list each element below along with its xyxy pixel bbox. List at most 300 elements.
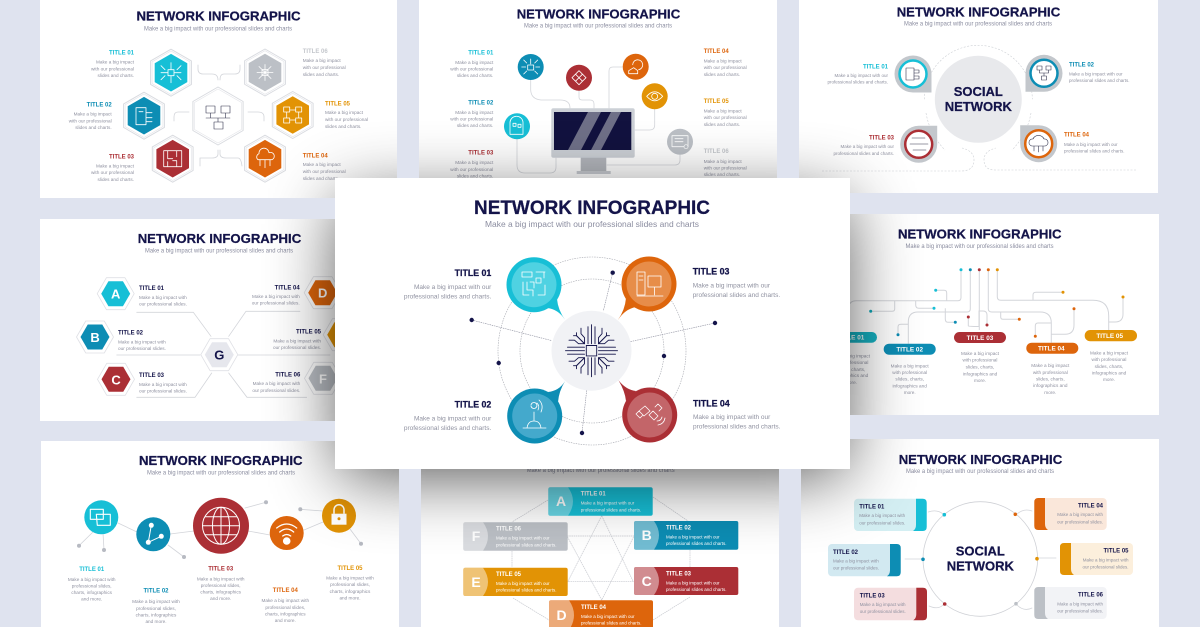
pill: title 04: with professional bbox=[1033, 370, 1068, 375]
panel: circuit timeline slide bbox=[800, 214, 1159, 415]
heading: NETWORK INFOGRAPHIC bbox=[899, 452, 1063, 467]
label: title 03 bbox=[833, 135, 895, 156]
central circle: NETWORK bbox=[947, 559, 1014, 574]
label: title 03: professional slides and charts. bbox=[693, 292, 780, 299]
label: title 03 bbox=[91, 155, 135, 182]
hexagon: E bbox=[323, 319, 360, 351]
subtitle: Make a big impact with our professional slides and charts bbox=[147, 470, 295, 477]
label: title 02 bbox=[118, 330, 166, 351]
pill: title 04: infographics and bbox=[1033, 383, 1068, 388]
subtitle: Make a big impact with our professional slides and charts bbox=[524, 22, 672, 30]
central circle bbox=[923, 502, 1038, 616]
label: title 03 bbox=[693, 267, 780, 299]
label: title 01: TITLE 01 bbox=[455, 268, 491, 278]
label: title 03: TITLE 03 bbox=[693, 267, 729, 277]
label: title 06: Make a big impact bbox=[303, 58, 341, 63]
label: title 03: Make a big impact bbox=[96, 164, 135, 168]
box: title 05 bbox=[1060, 543, 1133, 575]
label: title 02: professional slides and charts. bbox=[404, 425, 491, 432]
heading: NETWORK INFOGRAPHIC bbox=[138, 231, 302, 246]
label: title 01: Make a big impact with our bbox=[834, 73, 888, 78]
connectors bbox=[517, 67, 680, 173]
label: title 01 bbox=[68, 567, 116, 602]
label: title 02: charts, infographics bbox=[136, 612, 177, 618]
box: title 02 bbox=[828, 544, 901, 576]
label: title 04: charts, infographics bbox=[265, 612, 306, 616]
box: title 05: our professional slides. bbox=[1082, 564, 1128, 570]
hexagon: B bbox=[76, 321, 114, 353]
pill: title 05 bbox=[1085, 330, 1137, 382]
central circle bbox=[935, 56, 1022, 143]
central circle: SOCIAL bbox=[956, 543, 1005, 558]
label: title 02: professional slides, bbox=[136, 606, 176, 611]
box: title 04: TITLE 04 bbox=[1078, 504, 1104, 510]
label: title 03: professional slides and charts. bbox=[833, 151, 894, 156]
label: title 01: Make a big impact with bbox=[68, 577, 116, 582]
box: B: Make a big impact with our bbox=[666, 534, 720, 539]
label: title 01 bbox=[827, 65, 889, 85]
box: title 04 bbox=[1034, 498, 1107, 530]
label: title 05: professional slides, bbox=[330, 582, 370, 587]
hexagon: G: G bbox=[214, 348, 224, 363]
subtitle: Make a big impact with our professional slides and charts bbox=[906, 243, 1054, 250]
circle dots bbox=[921, 512, 1039, 606]
pill: title 05: TITLE 05 bbox=[1096, 333, 1123, 340]
label: title 04 bbox=[693, 399, 781, 431]
label: title 02: with our professional bbox=[450, 116, 493, 122]
label: title 04: Make a big impact with bbox=[252, 294, 300, 299]
spokes with dots bbox=[472, 273, 715, 433]
label: title 06: with our professional bbox=[303, 65, 346, 70]
connectors bbox=[117, 311, 330, 397]
icon circle: title 05 bbox=[642, 83, 668, 109]
label: title 06: our professional slides. bbox=[252, 388, 300, 393]
label: title 04: professional slides, bbox=[265, 605, 305, 610]
monitor bbox=[551, 108, 635, 174]
box: F: professional slides and charts. bbox=[496, 542, 557, 547]
label: title 03: with our professional bbox=[450, 167, 493, 172]
label: title 03: slides and charts. bbox=[98, 177, 134, 182]
network dots bbox=[470, 270, 717, 435]
label: title 02: Make a big impact with bbox=[118, 339, 166, 344]
icon circle: title 04 bbox=[623, 54, 649, 80]
hexagon: G bbox=[201, 339, 238, 371]
label: title 03 bbox=[450, 151, 494, 178]
subtitle: Make a big impact with our professional slides and charts bbox=[527, 467, 675, 474]
icon circle: title 01 bbox=[518, 54, 544, 80]
label: title 05 bbox=[273, 330, 322, 350]
hexagon: C: C bbox=[111, 372, 121, 387]
box: E: Make a big impact with our bbox=[496, 581, 550, 586]
label: title 02: slides and charts. bbox=[457, 123, 493, 128]
label: title 03: TITLE 03 bbox=[109, 155, 135, 161]
box: F: TITLE 06 bbox=[496, 527, 522, 533]
box: title 05: Make a big impact with bbox=[1083, 558, 1129, 562]
hexagon: F bbox=[304, 362, 342, 394]
box: D: TITLE 04 bbox=[581, 605, 607, 611]
label: title 06: Make a big impact bbox=[704, 159, 742, 164]
label: title 06: Make a big impact with bbox=[253, 381, 301, 386]
label: title 01: with our professional bbox=[91, 66, 134, 72]
label: title 03: with our professional bbox=[91, 170, 134, 175]
label: title 05: TITLE 05 bbox=[337, 566, 363, 572]
label: title 06 bbox=[252, 372, 301, 393]
label: title 05: Make a big impact with bbox=[326, 576, 374, 581]
label: title 02: TITLE 02 bbox=[118, 330, 144, 336]
box: C: TITLE 03 bbox=[666, 571, 692, 577]
pill: title 01: TITLE 01 bbox=[838, 335, 865, 342]
pill: title 03: Make a big impact bbox=[961, 351, 1000, 356]
panel: computer network slide bbox=[419, 0, 777, 178]
box: title 03 bbox=[854, 588, 927, 620]
pin: title 04 bbox=[1020, 125, 1057, 162]
label: title 06: slides and charts. bbox=[704, 172, 740, 177]
label: title 03: Make a big impact with bbox=[139, 382, 187, 387]
box: A: TITLE 01 bbox=[581, 492, 606, 498]
label: title 04: our professional slides. bbox=[252, 300, 300, 306]
dotted rings bbox=[498, 257, 686, 445]
subtitle: Make a big impact with our professional slides and charts bbox=[904, 21, 1052, 28]
label: title 05: slides and charts. bbox=[704, 122, 740, 127]
label: title 04: slides and charts. bbox=[303, 176, 339, 181]
label: title 06 bbox=[704, 149, 747, 177]
box: title 04: Make a big impact with bbox=[1057, 512, 1103, 517]
hexagon: A bbox=[97, 278, 134, 310]
icon circle: title 02 bbox=[504, 113, 530, 139]
bubble: title 02 bbox=[507, 381, 565, 444]
label: title 03: slides and charts. bbox=[457, 174, 493, 178]
label: title 03: TITLE 03 bbox=[208, 567, 234, 573]
box: E: E bbox=[471, 574, 481, 590]
pill: title 03: infographics and bbox=[963, 372, 998, 376]
label: title 02: TITLE 02 bbox=[143, 589, 169, 595]
label: title 04: with our professional bbox=[303, 169, 346, 174]
box: E bbox=[463, 568, 568, 596]
box: A bbox=[548, 487, 653, 516]
label: title 04: Make a big impact bbox=[303, 162, 341, 167]
pill: title 01: infographics and bbox=[834, 373, 869, 378]
bubble: title 01 bbox=[506, 257, 565, 320]
label: title 04 bbox=[252, 285, 300, 306]
label: title 01: professional slides, bbox=[72, 584, 112, 588]
circuit lines bbox=[848, 270, 1123, 344]
label: title 04: professional slides and charts. bbox=[1064, 148, 1125, 154]
connectors bbox=[905, 510, 1056, 609]
box: D bbox=[549, 600, 653, 627]
label: title 05: charts, infographics bbox=[330, 589, 371, 594]
label: title 01: and more. bbox=[81, 596, 102, 602]
box: A: professional slides and charts. bbox=[581, 507, 641, 512]
box: B: TITLE 02 bbox=[666, 525, 692, 531]
subtitle: Make a big impact with our professional slides and charts bbox=[906, 468, 1054, 475]
label: title 02: professional slides and charts. bbox=[1069, 78, 1130, 83]
pill: title 01: Make a big impact bbox=[832, 354, 871, 358]
label: title 01: Make a big impact bbox=[455, 60, 494, 65]
pill: title 03: TITLE 03 bbox=[967, 335, 994, 342]
label: title 02 bbox=[132, 589, 180, 624]
central circle: SOCIAL bbox=[954, 84, 1003, 99]
label: title 06: with our professional bbox=[704, 166, 747, 170]
pill: title 04 bbox=[1026, 343, 1078, 395]
box: E: professional slides and charts. bbox=[496, 588, 557, 593]
bubble: title 03 bbox=[618, 256, 676, 320]
icon circle: wifi bbox=[270, 516, 304, 550]
pill: title 02: infographics and bbox=[892, 383, 927, 388]
label: title 06 bbox=[303, 49, 346, 77]
subtitle: Make a big impact with our professional slides and charts bbox=[485, 219, 699, 229]
label: title 02 bbox=[69, 103, 112, 130]
label: title 05 bbox=[325, 102, 368, 129]
label: title 01: TITLE 01 bbox=[863, 65, 889, 71]
label: title 02: TITLE 02 bbox=[87, 103, 112, 109]
box: title 06: TITLE 06 bbox=[1078, 592, 1104, 598]
label: title 01: Make a big impact with bbox=[139, 295, 187, 300]
icon circle: title 06 bbox=[667, 129, 693, 155]
box: title 02: our professional slides. bbox=[833, 566, 879, 571]
pill: title 04: Make a big impact bbox=[1031, 363, 1070, 368]
pill: title 04: more. bbox=[1044, 390, 1056, 395]
label: title 02 bbox=[1069, 63, 1130, 83]
label: title 05: our professional slides. bbox=[273, 345, 321, 350]
label: title 03 bbox=[139, 373, 187, 394]
label: title 02: Make a big impact with our bbox=[414, 416, 492, 423]
label: title 01: Make a big impact bbox=[96, 60, 135, 65]
pill: title 05: Make a big impact bbox=[1090, 350, 1129, 356]
label: title 01: slides and charts. bbox=[98, 73, 134, 78]
panel: social network pins slide bbox=[799, 0, 1158, 193]
heading: NETWORK INFOGRAPHIC bbox=[897, 5, 1061, 20]
label: title 02: with our professional bbox=[69, 118, 112, 124]
hexagon: C bbox=[98, 363, 134, 395]
pill: title 05: more. bbox=[1103, 377, 1115, 382]
pill: title 03: more. bbox=[974, 378, 986, 383]
panel: star of lettered boxes slide bbox=[421, 440, 779, 627]
label: title 01: charts, infographics bbox=[71, 590, 113, 595]
label: title 01: with our professional bbox=[450, 66, 493, 72]
label: title 02: slides and charts. bbox=[75, 125, 112, 130]
small dots bbox=[77, 500, 363, 559]
hexagon: D bbox=[304, 277, 341, 309]
connectors bbox=[174, 65, 264, 166]
label: title 05: slides and charts. bbox=[325, 124, 361, 129]
label: title 06: TITLE 06 bbox=[303, 49, 328, 55]
label: title 05: Make a big impact with bbox=[273, 338, 321, 344]
pill: title 01: more. bbox=[845, 380, 857, 385]
connectors bbox=[79, 502, 361, 557]
box: title 01: TITLE 01 bbox=[859, 505, 885, 511]
panel: central network slide bbox=[335, 178, 850, 469]
label: title 02: TITLE 02 bbox=[1069, 63, 1095, 69]
label: title 03: TITLE 03 bbox=[869, 135, 895, 141]
label: title 04: Make a big impact with our bbox=[693, 414, 771, 421]
label: title 05 bbox=[704, 99, 747, 127]
icon circle: nodes bbox=[136, 517, 170, 551]
connector dots bbox=[869, 268, 1124, 338]
label: title 01: TITLE 01 bbox=[468, 50, 494, 56]
label: title 02: Make a big impact with bbox=[132, 599, 180, 604]
pill: title 05: infographics and bbox=[1092, 370, 1127, 376]
panel: social network boxes slide bbox=[801, 439, 1159, 627]
label: title 01 bbox=[450, 50, 494, 78]
pill: title 05: slides, charts, bbox=[1095, 364, 1123, 369]
label: title 01: slides and charts. bbox=[457, 73, 493, 78]
label: title 03: and more. bbox=[210, 596, 231, 601]
label: title 04: Make a big impact with bbox=[261, 598, 310, 603]
dashed ring and baseline bbox=[822, 45, 1136, 171]
heading: NETWORK INFOGRAPHIC bbox=[517, 6, 681, 21]
label: title 01 bbox=[404, 268, 492, 301]
label: title 03: Make a big impact with our bbox=[840, 144, 894, 149]
label: title 04 bbox=[261, 588, 310, 623]
box: F bbox=[463, 522, 568, 551]
star connectors bbox=[512, 497, 690, 620]
panel: lettered hexagons slide bbox=[40, 219, 400, 421]
box: title 05: TITLE 05 bbox=[1103, 548, 1129, 554]
label: title 04: TITLE 04 bbox=[275, 285, 300, 291]
pill: title 04: TITLE 04 bbox=[1038, 346, 1065, 352]
hexagon: F: F bbox=[319, 371, 327, 386]
panel: hexagon network slide bbox=[40, 0, 397, 198]
label: title 01: TITLE 01 bbox=[109, 51, 135, 57]
label: title 05: with our professional bbox=[325, 117, 368, 122]
pill: title 03: slides, charts, bbox=[966, 364, 994, 369]
hexagon: title 06 bbox=[245, 49, 285, 96]
label: title 01: our professional slides. bbox=[139, 302, 187, 306]
label: title 03: Make a big impact with bbox=[197, 576, 245, 581]
pill: title 02: TITLE 02 bbox=[896, 346, 923, 354]
hexagon: D: D bbox=[318, 286, 327, 301]
pill: title 03 bbox=[954, 332, 1006, 383]
label: title 03: TITLE 03 bbox=[139, 373, 165, 379]
icon circle: chat bbox=[84, 500, 118, 534]
subtitle: Make a big impact with our professional slides and charts bbox=[144, 26, 292, 32]
label: title 02: TITLE 02 bbox=[468, 101, 494, 107]
subtitle: Make a big impact with our professional slides and charts bbox=[145, 247, 293, 254]
pill: title 04: slides, charts, bbox=[1036, 376, 1065, 382]
label: title 01: Make a big impact with our bbox=[414, 284, 492, 291]
pill: title 02: slides, charts, bbox=[895, 377, 924, 382]
box: title 02: TITLE 02 bbox=[833, 550, 859, 556]
pill: title 02: with professional bbox=[892, 370, 927, 375]
hexagon: title 03 bbox=[152, 135, 193, 182]
bubble: title 04 bbox=[618, 380, 677, 442]
box: D: D bbox=[556, 607, 567, 623]
panel: connected circles slide bbox=[41, 441, 399, 627]
icon circle: globe bbox=[193, 498, 249, 554]
box: title 03: Make a big impact with bbox=[860, 602, 906, 607]
pill: title 01 bbox=[825, 332, 877, 385]
label: title 05: TITLE 05 bbox=[296, 330, 322, 336]
label: title 01: TITLE 01 bbox=[79, 567, 105, 573]
label: title 04 bbox=[303, 154, 346, 181]
box: F: Make a big impact with our bbox=[496, 536, 550, 541]
central hub with chip icon bbox=[552, 311, 632, 391]
label: title 01: TITLE 01 bbox=[139, 286, 165, 292]
label: title 02: Make a big impact bbox=[455, 110, 494, 115]
heading: NETWORK INFOGRAPHIC bbox=[139, 453, 303, 468]
label: title 02: TITLE 02 bbox=[455, 400, 491, 410]
hexagon: centre network bbox=[193, 87, 243, 145]
box: title 06 bbox=[1034, 587, 1107, 619]
label: title 02: Make a big impact with our bbox=[1069, 72, 1123, 76]
box: title 04: our professional slides. bbox=[1057, 519, 1103, 524]
pin: title 01 bbox=[894, 56, 932, 92]
box: B bbox=[634, 521, 738, 550]
box: C bbox=[634, 567, 738, 595]
label: title 01: professional slides and charts. bbox=[827, 80, 888, 85]
label: title 02: our professional slides. bbox=[118, 346, 166, 351]
box: title 01: our professional slides. bbox=[859, 520, 905, 525]
label: title 03: our professional slides. bbox=[139, 388, 187, 394]
label: title 03: professional slides, bbox=[201, 583, 241, 588]
label: title 02: Make a big impact bbox=[74, 112, 112, 116]
label: title 03 bbox=[197, 567, 245, 601]
central card shadow bbox=[340, 200, 845, 475]
label: title 05: TITLE 05 bbox=[704, 99, 729, 105]
box: F: F bbox=[472, 528, 481, 544]
label: title 01 bbox=[91, 51, 135, 78]
box: C: Make a big impact with our bbox=[666, 580, 720, 585]
pill: title 02: Make a big impact bbox=[891, 363, 929, 368]
label: title 04: and more. bbox=[275, 618, 296, 623]
label: title 04: professional slides and charts. bbox=[693, 424, 781, 431]
pill: title 01: with professional bbox=[834, 360, 868, 365]
icon circle: title 03 bbox=[566, 65, 592, 91]
label: title 05: TITLE 05 bbox=[325, 102, 351, 108]
pin: title 02 bbox=[1026, 55, 1062, 92]
label: title 06: slides and charts. bbox=[303, 72, 339, 77]
box: title 03: our professional slides. bbox=[860, 609, 906, 614]
box: title 06: Make a big impact with bbox=[1057, 602, 1103, 606]
heading: NETWORK INFOGRAPHIC bbox=[474, 198, 710, 219]
box: A: A bbox=[556, 493, 566, 509]
label: title 05: with our professional bbox=[704, 115, 747, 120]
pin: title 03 bbox=[900, 126, 937, 163]
icon circle: lock bbox=[322, 499, 356, 533]
label: title 04: Make a big impact with our bbox=[1064, 142, 1118, 147]
box: E: TITLE 05 bbox=[496, 572, 522, 578]
hexagon: title 04 bbox=[245, 135, 285, 182]
box: title 03: TITLE 03 bbox=[860, 594, 885, 600]
label: title 04: TITLE 04 bbox=[303, 154, 328, 160]
pill: title 05: with professional bbox=[1092, 357, 1126, 362]
label: title 06: TITLE 06 bbox=[704, 149, 729, 155]
label: title 02 bbox=[450, 101, 494, 128]
box: B: professional slides and charts. bbox=[666, 541, 727, 546]
label: title 04 bbox=[704, 49, 747, 77]
pill: title 02: more. bbox=[904, 390, 916, 395]
box: D: professional slides and charts. bbox=[581, 621, 642, 626]
box: B: B bbox=[642, 527, 652, 543]
box: D: Make a big impact with our bbox=[581, 614, 635, 619]
label: title 05: Make a big impact bbox=[704, 108, 742, 114]
label: title 04: TITLE 04 bbox=[1064, 132, 1090, 138]
box: title 01 bbox=[854, 499, 927, 531]
box: C: C bbox=[642, 573, 652, 589]
hexagon: title 01 bbox=[151, 49, 191, 96]
pill: title 01: slides, charts, bbox=[837, 367, 865, 372]
heading: NETWORK INFOGRAPHIC bbox=[898, 227, 1062, 242]
label: title 04: TITLE 04 bbox=[693, 399, 730, 409]
central circle: NETWORK bbox=[945, 99, 1012, 114]
box: title 02: Make a big impact with bbox=[833, 558, 879, 564]
label: title 04: with our professional bbox=[704, 65, 747, 70]
hexagon: title 02 bbox=[124, 92, 164, 139]
box: C: professional slides and charts. bbox=[666, 587, 727, 592]
label: title 04: slides and charts. bbox=[704, 72, 740, 77]
pill: title 03: with professional bbox=[963, 358, 997, 363]
label: title 01 bbox=[139, 286, 187, 306]
